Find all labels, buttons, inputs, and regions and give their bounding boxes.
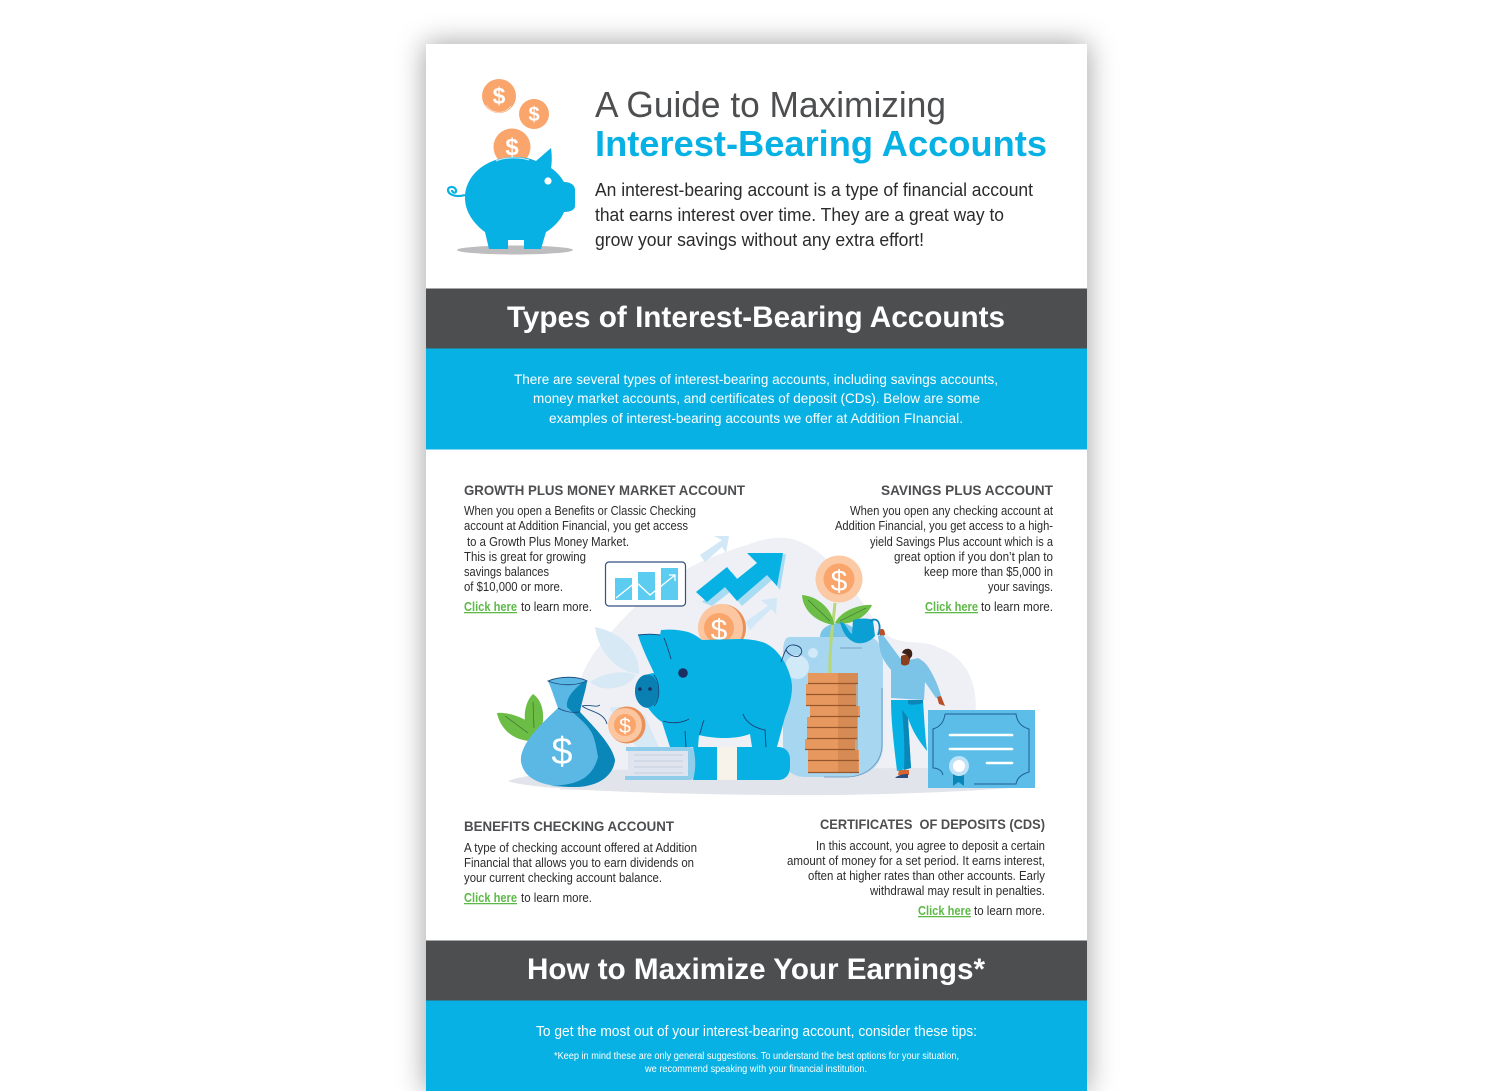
plant stem: [830, 603, 835, 673]
section band: types heading: [426, 288, 1087, 348]
text block: benefits checking account: your current checking account balance.: [464, 870, 662, 885]
header coin 3: [494, 128, 530, 166]
chart card icon: [606, 562, 686, 606]
icon: header piggy bank with falling coins: [448, 79, 575, 254]
small coin by bag: [608, 706, 646, 744]
illustration: savings scene: [497, 536, 1035, 795]
panel: types intro: [426, 348, 1087, 450]
leaves behind money bag: [497, 694, 545, 741]
text block: growth plus money market account: of $10,000 or more.: [464, 579, 563, 594]
small coin by bag: $: [619, 715, 631, 738]
intro text: that earns interest over time. They are a great way to: [595, 204, 1004, 225]
text block: growth plus money market account: This is great for growing: [464, 549, 586, 564]
background blob: [560, 538, 976, 790]
watering can: [840, 618, 880, 643]
text block: growth plus money market account: to learn more.: [521, 599, 592, 614]
person watering plant: [878, 629, 945, 778]
section band: maximize heading: How to Maximize Your Earnings*: [527, 953, 985, 986]
text block: benefits checking account: [464, 818, 697, 905]
intro text: grow your savings without any extra effort!: [595, 229, 924, 250]
section band: maximize heading: [426, 940, 1087, 1000]
text block: savings plus account: When you open any checking account at: [850, 503, 1053, 518]
certificate: [928, 710, 1035, 788]
panel: maximize intro: we recommend speaking with your financial institution.: [644, 1064, 867, 1075]
plant coin: [816, 556, 862, 602]
intro text: [595, 179, 1033, 250]
coin stack: [805, 673, 860, 773]
title: [595, 84, 1047, 164]
text block: growth plus money market account: Click here: [464, 599, 517, 614]
money bag: $: [551, 731, 573, 773]
text block: benefits checking account: Financial that allows you to earn dividends on: [464, 855, 694, 870]
text block: growth plus money market account: [464, 482, 745, 614]
panel: types intro: There are several types of interest-bearing accounts, including savings accounts,: [514, 371, 998, 387]
panel: maximize intro: [426, 1000, 1087, 1091]
header pig body: [465, 148, 575, 249]
text block: certificates of deposits: amount of money for a set period. It earns interest,: [787, 853, 1045, 868]
header coin 1: $: [493, 83, 506, 109]
ground: [508, 768, 1010, 795]
text block: savings plus account: [835, 482, 1054, 614]
section band: types heading: Types of Interest-Bearing Accounts: [507, 301, 1005, 334]
text block: growth plus money market account: GROWTH PLUS MONEY MARKET ACCOUNT: [464, 482, 745, 498]
main piggy bank: [635, 630, 802, 747]
title: Interest-Bearing Accounts: [595, 123, 1047, 164]
money bag: [521, 677, 615, 787]
panel: types intro: money market accounts, and certificates of deposit (CDs). Below are some: [533, 390, 980, 406]
book under pig: [625, 747, 790, 780]
header coin 3: $: [505, 134, 519, 161]
panel: maximize intro: *Keep in mind these are only general suggestions. To understand the best options for your situation,: [554, 1051, 959, 1062]
text block: certificates of deposits: withdrawal may result in penalties.: [869, 883, 1045, 898]
plant leaves: [802, 595, 872, 625]
header coin 1: [482, 79, 516, 113]
text block: savings plus account: your savings.: [988, 579, 1053, 594]
text block: savings plus account: keep more than $5,000 in: [924, 564, 1053, 579]
text block: certificates of deposits: Click here: [918, 903, 971, 918]
coin slot highlight: [496, 158, 529, 161]
pig eye: [678, 668, 688, 678]
pale growth arrows: [700, 536, 777, 630]
text block: certificates of deposits: CERTIFICATES OF DEPOSITS (CDS): [820, 816, 1045, 832]
text block: benefits checking account: A type of checking account offered at Addition: [464, 840, 697, 855]
big growth arrow: [696, 553, 786, 606]
text block: savings plus account: yield Savings Plus account which is a: [870, 534, 1054, 549]
text block: savings plus account: great option if you don’t plan to: [894, 549, 1053, 564]
text block: certificates of deposits: In this account, you agree to deposit a certain: [816, 838, 1045, 853]
header pig tail: [448, 187, 465, 196]
plant coin: $: [831, 565, 848, 598]
title: A Guide to Maximizing: [595, 84, 946, 125]
text block: savings plus account: SAVINGS PLUS ACCOUNT: [881, 482, 1053, 498]
header pig eye: [544, 177, 552, 185]
header coin 2: $: [528, 104, 540, 126]
text block: growth plus money market account: When you open a Benefits or Classic Checking: [464, 503, 696, 518]
coin above main pig: [698, 604, 746, 652]
pig snout: [635, 674, 659, 708]
text block: savings plus account: Click here: [925, 599, 978, 614]
pale background leaves: [590, 627, 660, 750]
text block: savings plus account: Addition Financial, you get access to a high-: [835, 518, 1053, 533]
text block: growth plus money market account: savings balances: [464, 564, 549, 579]
intro text: An interest-bearing account is a type of financial account: [595, 179, 1033, 200]
text block: certificates of deposits: [787, 816, 1046, 918]
coin above main pig: $: [711, 614, 728, 647]
text block: benefits checking account: BENEFITS CHECKING ACCOUNT: [464, 818, 674, 834]
text block: certificates of deposits: to learn more.: [974, 903, 1045, 918]
glass jar: [783, 623, 883, 777]
text block: growth plus money market account: to a Growth Plus Money Market.: [467, 534, 629, 549]
panel: types intro: examples of interest-bearing accounts we offer at Addition FInancial.: [549, 410, 963, 426]
header pig shadow: [457, 246, 573, 254]
text block: growth plus money market account: account at Addition Financial, you get access: [464, 518, 688, 533]
header coin 2: [519, 99, 549, 129]
panel: maximize intro: To get the most out of your interest-bearing account, consider these tips:: [536, 1024, 977, 1040]
text block: benefits checking account: Click here: [464, 890, 517, 905]
text block: benefits checking account: to learn more.: [521, 890, 592, 905]
text block: savings plus account: to learn more.: [981, 599, 1053, 614]
text block: certificates of deposits: often at higher rates than other accounts. Early: [808, 868, 1046, 883]
